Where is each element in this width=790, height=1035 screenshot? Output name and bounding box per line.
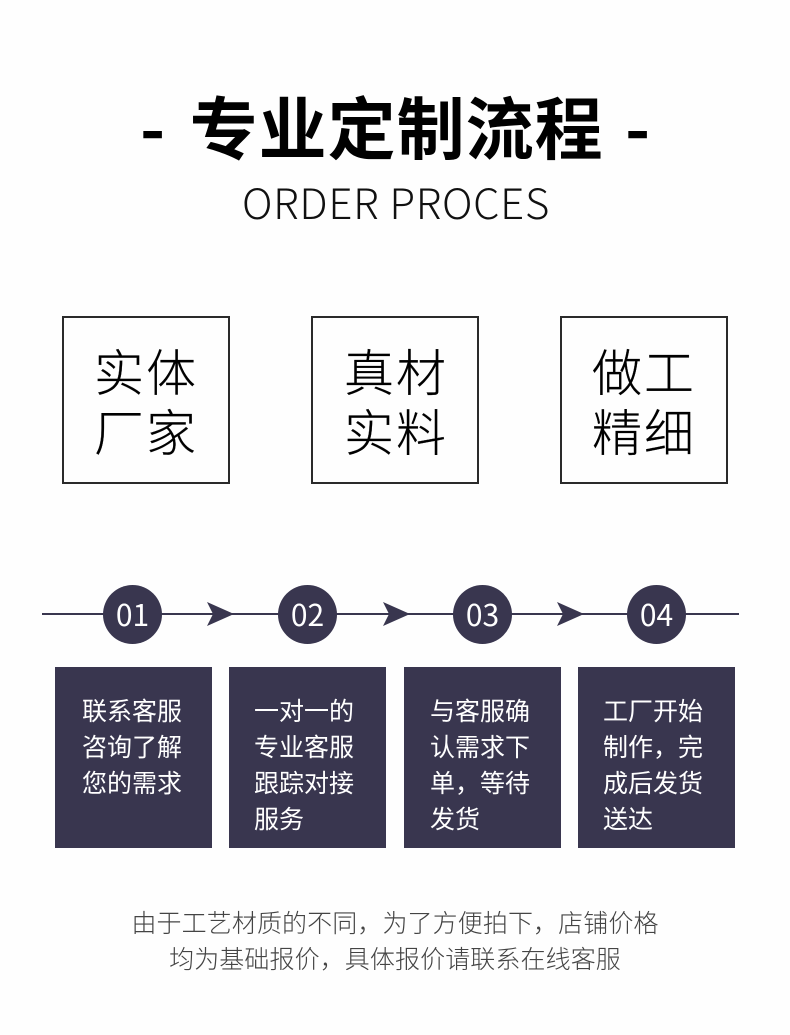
panel: feature 3: 精细 — [592, 394, 696, 466]
process timeline — [42, 585, 739, 644]
step number 02: 02 — [291, 591, 324, 635]
panel: step 3 — [404, 667, 561, 848]
panel: feature 2: 实料 — [344, 394, 448, 466]
step number 04 — [627, 585, 686, 644]
panel: step 3: 与客服确 — [430, 692, 530, 728]
panel: step 4: 工厂开始 — [603, 692, 703, 728]
panel: step 2: 一对一的 — [254, 692, 354, 728]
panel: step 1: 联系客服 — [82, 692, 182, 728]
panel: feature 3: 做工 — [592, 334, 696, 406]
panel: step 4: 送达 — [603, 800, 653, 836]
title: - 专业定制流程 - — [140, 75, 651, 174]
panel: feature 1 — [62, 316, 230, 484]
panel: step 3: 认需求下 — [430, 728, 530, 764]
panel: step 2: 专业客服 — [254, 728, 354, 764]
step number 03: 03 — [466, 591, 499, 635]
subtitle: ORDER PROCES — [242, 171, 550, 232]
panel: step 4: 制作，完 — [603, 728, 703, 764]
panel: feature 2 — [311, 316, 479, 484]
step number 02 — [278, 585, 337, 644]
panel: step 3: 单，等待 — [430, 764, 530, 800]
step number 01: 01 — [116, 591, 149, 635]
panel: feature 2: 真材 — [344, 334, 448, 406]
panel: feature 1: 实体 — [94, 334, 198, 406]
footer note: 由于工艺材质的不同，为了方便拍下，店铺价格 — [131, 904, 659, 940]
step number 01 — [103, 585, 162, 644]
panel: step 1: 您的需求 — [82, 764, 182, 800]
panel: step 1 — [55, 667, 212, 848]
panel: step 3: 发货 — [430, 800, 480, 836]
footer note: 均为基础报价，具体报价请联系在线客服 — [169, 940, 621, 976]
panel: step 2: 跟踪对接 — [254, 764, 354, 800]
panel: step 1: 咨询了解 — [82, 728, 182, 764]
panel: feature 3 — [560, 316, 728, 484]
panel: step 4: 成后发货 — [603, 764, 703, 800]
step number 03 — [453, 585, 512, 644]
footer note — [131, 904, 659, 976]
step number 04: 04 — [640, 591, 673, 635]
panel: feature 1: 厂家 — [94, 394, 198, 466]
panel: step 2: 服务 — [254, 800, 304, 836]
panel: step 4 — [578, 667, 735, 848]
panel: step 2 — [229, 667, 386, 848]
